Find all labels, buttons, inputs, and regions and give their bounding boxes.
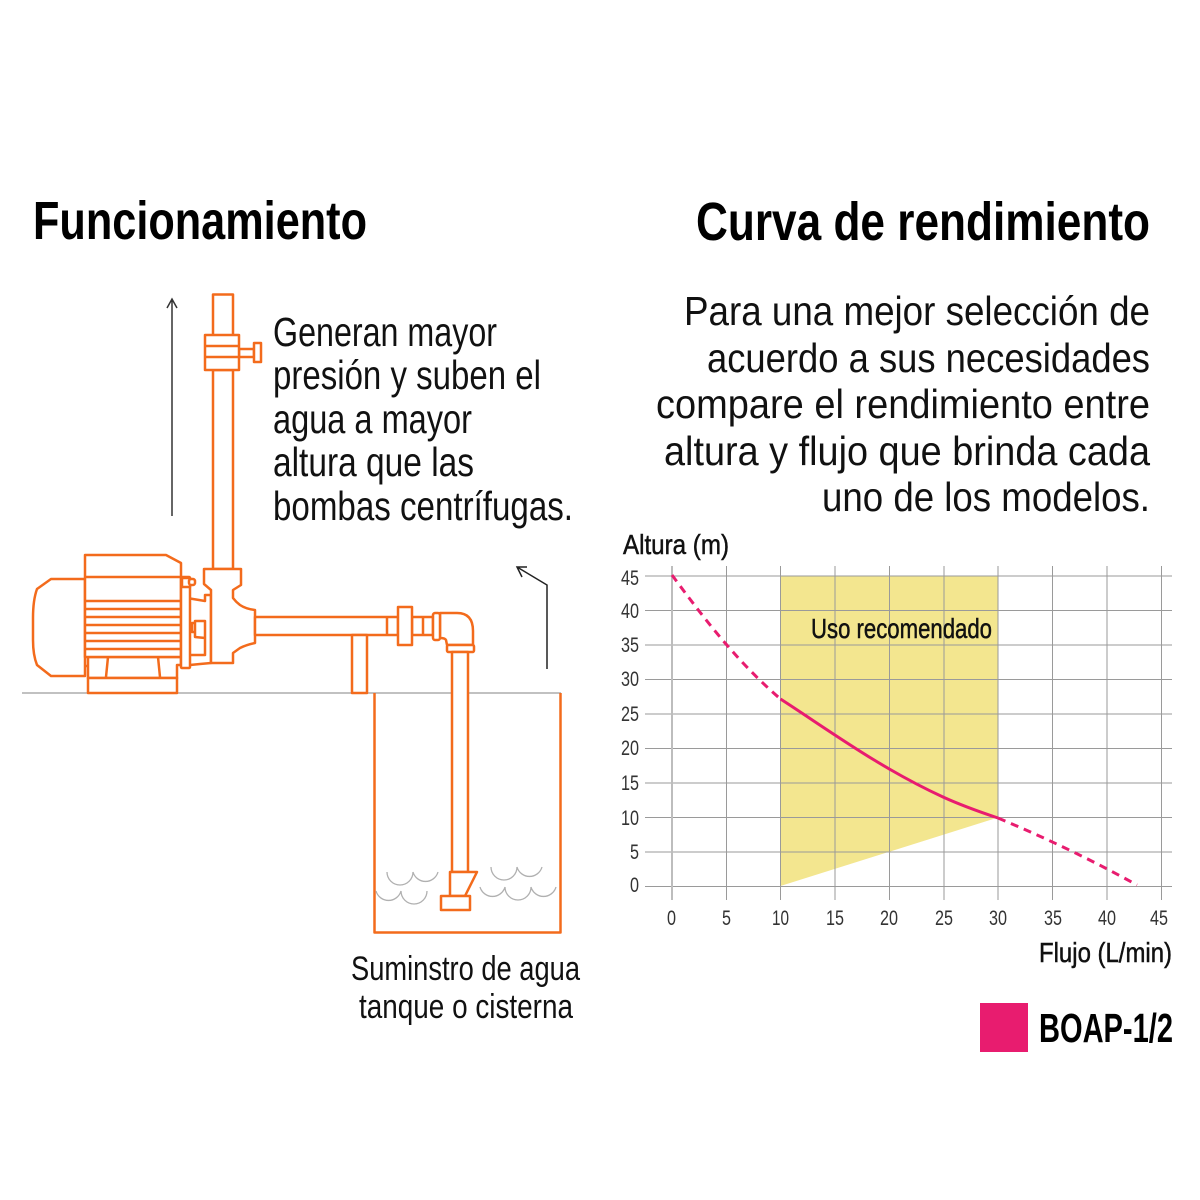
pump bracket	[187, 595, 211, 665]
performance curve: dashed left section	[672, 575, 780, 699]
text block: model selection advice: acuerdo a sus necesidades	[707, 335, 1150, 381]
text block: pump description	[273, 309, 573, 529]
x axis labels: 40	[1098, 907, 1116, 930]
pipe support	[352, 635, 367, 693]
text block: pump description: Generan mayor	[273, 309, 497, 355]
pump illustration	[33, 294, 477, 910]
y axis labels: 35	[621, 634, 639, 657]
caption: water supply: Suminstro de agua	[351, 950, 580, 988]
text block: model selection advice: uno de los modelos.	[822, 474, 1150, 520]
foot valve	[441, 872, 477, 910]
outlet pipe	[213, 294, 233, 569]
performance curve: solid section	[780, 699, 998, 818]
x axis labels: 45	[1150, 907, 1168, 930]
text block: pump description: agua a mayor	[273, 396, 472, 442]
x axis labels: 20	[880, 907, 898, 930]
motor cooling fins	[85, 577, 181, 649]
ground line	[22, 692, 561, 694]
performance chart	[621, 529, 1172, 968]
text block: pump description: presión y suben el	[273, 352, 541, 398]
tank or cistern	[374, 693, 560, 932]
text block: pump description: altura que las	[273, 439, 474, 485]
y axis labels: 10	[621, 807, 639, 830]
motor body	[85, 555, 181, 657]
legend swatch	[980, 1003, 1028, 1052]
legend	[980, 1003, 1173, 1052]
text block: pump description: bombas centrífugas.	[273, 483, 573, 529]
x axis labels	[667, 907, 1168, 930]
pipe fittings	[398, 607, 433, 645]
recommended use label: Uso recomendado	[811, 613, 992, 644]
x axis labels: 5	[722, 907, 731, 930]
text block: model selection advice: Para una mejor selección de	[684, 288, 1150, 334]
arrow: water rising through outlet pipe	[167, 299, 177, 516]
x axis labels: 25	[935, 907, 953, 930]
x axis labels: 30	[989, 907, 1007, 930]
performance curve: dashed right section	[998, 818, 1137, 885]
y axis labels: 45	[621, 567, 639, 590]
y axis labels: 20	[621, 737, 639, 760]
chart grid	[645, 566, 1172, 900]
x axis labels: 10	[772, 907, 789, 930]
y axis title: Altura (m)	[623, 529, 729, 560]
x axis labels: 0	[667, 907, 676, 930]
caption: water supply: tanque o cisterna	[359, 988, 573, 1026]
water waves	[376, 867, 556, 904]
heading: Funcionamiento: Funcionamiento	[33, 191, 367, 251]
recommended use area	[780, 576, 998, 886]
y axis labels: 15	[621, 772, 639, 795]
pump volute	[204, 569, 255, 663]
x axis title: Flujo (L/min)	[1039, 937, 1172, 968]
y axis labels: 40	[621, 600, 639, 623]
elbow	[433, 613, 474, 652]
y axis labels: 30	[621, 668, 639, 691]
text block: model selection advice: compare el rendimiento entre	[656, 381, 1150, 427]
x axis labels: 35	[1044, 907, 1062, 930]
y axis labels: 5	[630, 841, 639, 864]
y axis labels: 25	[621, 703, 639, 726]
motor flange	[181, 577, 195, 668]
drop pipe	[452, 652, 468, 872]
text block: model selection advice: altura y flujo que brinda cada	[664, 428, 1150, 474]
suction pipe	[255, 617, 398, 635]
motor base	[85, 657, 181, 693]
outlet valve	[205, 335, 261, 370]
text block: model selection advice	[656, 288, 1150, 520]
caption: water supply	[351, 950, 580, 1026]
y axis labels	[621, 567, 639, 897]
x axis labels: 15	[826, 907, 844, 930]
y axis labels: 0	[630, 874, 639, 897]
arrow: water entering from the tank	[517, 567, 547, 669]
motor rear cap	[33, 579, 85, 676]
